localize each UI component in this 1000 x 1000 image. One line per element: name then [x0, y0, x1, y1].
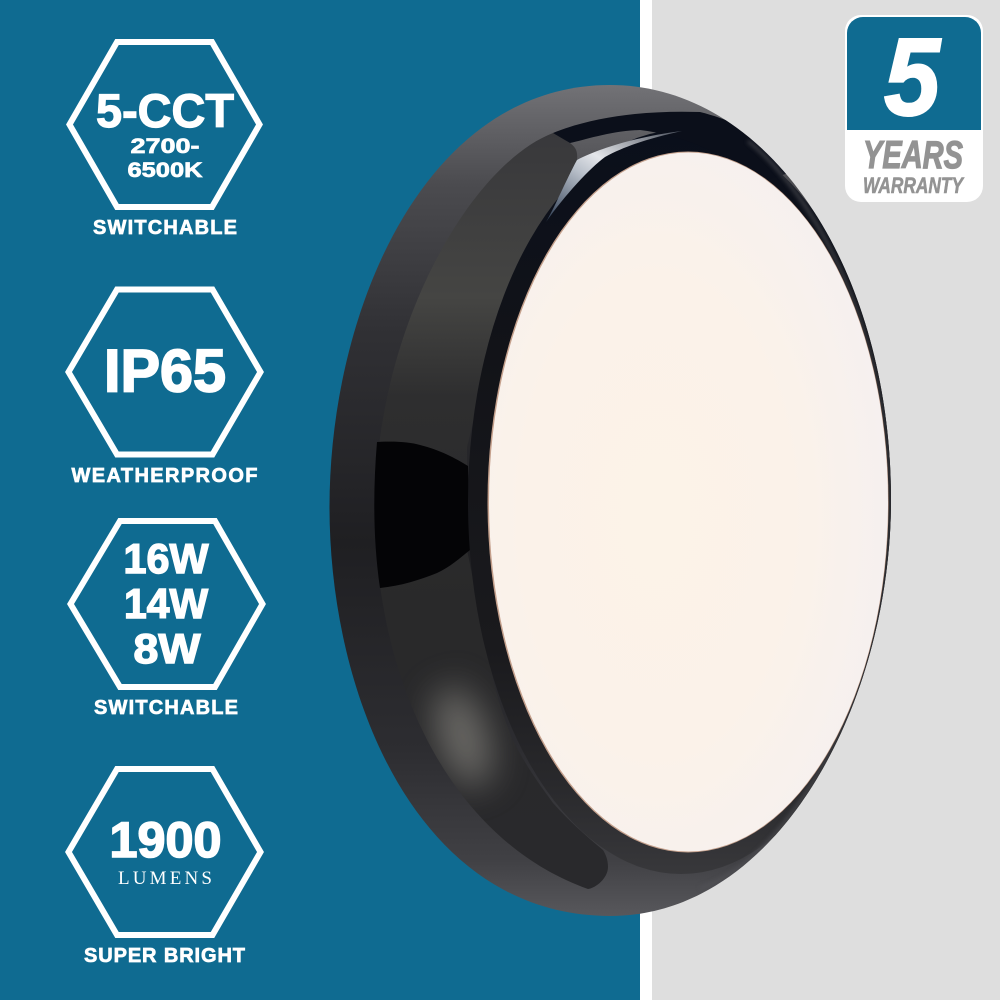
feature: wattage: 14W	[124, 580, 208, 627]
feature: 5-CCT: 5-CCT	[96, 84, 234, 137]
feature: wattage: SWITCHABLE	[94, 697, 238, 719]
badge number 5: 5	[884, 16, 942, 139]
lens copper edge	[488, 152, 888, 852]
feature: 5-CCT: 6500K	[128, 159, 202, 182]
badge: 5 years warranty	[845, 15, 983, 202]
soft grey reflection	[424, 680, 502, 794]
panel: white divider stripe	[640, 0, 652, 1000]
panel: blue feature column	[0, 0, 640, 1000]
feature: IP65: IP65	[104, 338, 226, 404]
feature: 1900 lumens: LUMENS	[118, 868, 212, 889]
badge years text: YEARS	[863, 134, 963, 177]
body inner ridge	[396, 133, 608, 889]
feature: 1900 lumens: 1900	[110, 812, 222, 868]
feature: 5-CCT: SWITCHABLE	[93, 217, 237, 239]
feature: wattage: 8W	[134, 625, 201, 672]
front black ring	[468, 112, 894, 888]
product: round bulkhead light	[329, 85, 894, 917]
right edge sheen	[730, 140, 891, 876]
top gloss highlight	[546, 131, 682, 222]
feature: 1900 lumens: SUPER BRIGHT	[84, 945, 245, 967]
feature: 5-CCT: 2700-	[130, 135, 200, 158]
feature: 1900 lumens	[68, 769, 260, 967]
badge warranty text: WARRANTY	[863, 173, 965, 198]
black reflection	[374, 442, 470, 588]
light body outer shell	[329, 85, 892, 917]
feature: wattage	[70, 521, 262, 719]
top dark band	[553, 112, 786, 175]
feature: IP65	[68, 290, 260, 487]
opal lens	[489, 152, 888, 852]
feature: IP65: WEATHERPROOF	[72, 465, 258, 487]
feature: 5-CCT	[70, 42, 260, 239]
feature: wattage: 16W	[124, 535, 209, 582]
